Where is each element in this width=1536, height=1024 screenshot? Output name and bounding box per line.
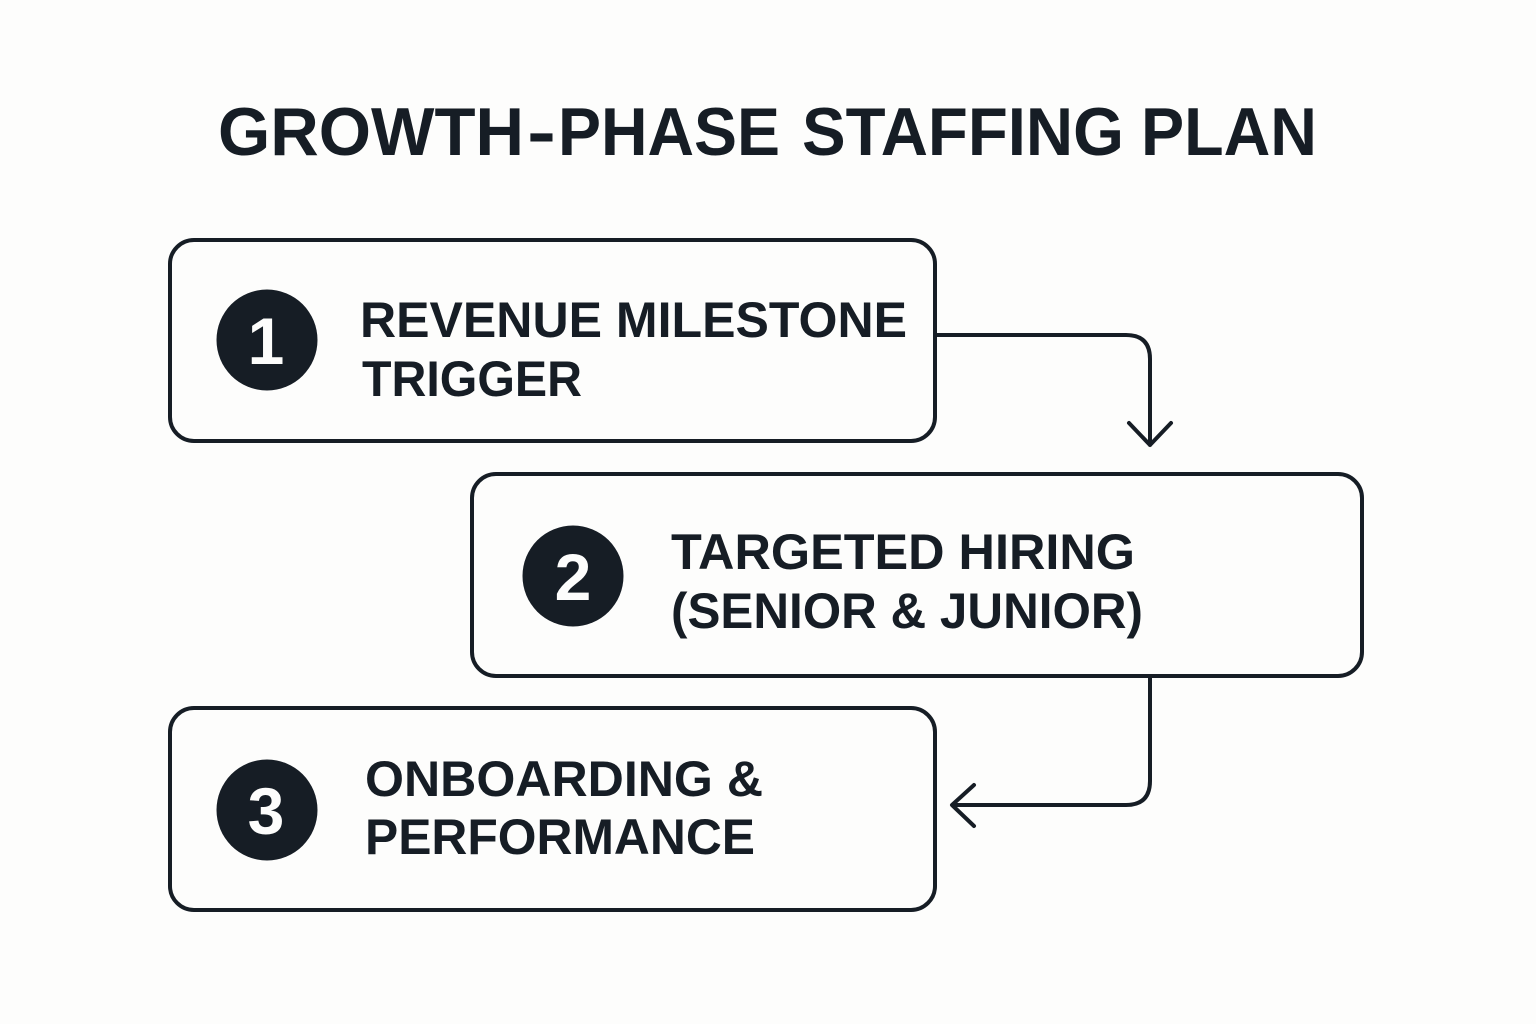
text: step 1 label: REVENUE MILESTONE bbox=[360, 292, 907, 348]
icon: number 3 badge: 3 bbox=[248, 774, 284, 848]
panel: step 1 bbox=[170, 240, 935, 441]
text: step 3 label: PERFORMANCE bbox=[365, 809, 755, 865]
text: step 1 label: TRIGGER bbox=[362, 351, 582, 407]
title: GROWTH bbox=[218, 94, 524, 170]
icon: number 1 badge bbox=[216, 290, 318, 390]
text: step 2 label: (SENIOR & JUNIOR) bbox=[671, 583, 1143, 639]
title: - bbox=[527, 94, 556, 170]
title: PHASE bbox=[558, 94, 780, 170]
panel: step 3 bbox=[170, 708, 935, 910]
icon: number 1 badge: 1 bbox=[248, 304, 284, 378]
title: STAFFING bbox=[802, 94, 1124, 170]
arrow: step 2 to step 3 bbox=[952, 678, 1150, 826]
arrow: step 1 to step 2 bbox=[937, 335, 1171, 445]
text: step 2 label: TARGETED HIRING bbox=[671, 524, 1135, 580]
icon: number 3 badge bbox=[216, 760, 318, 860]
panel: step 2 bbox=[472, 474, 1362, 676]
icon: number 2 badge: 2 bbox=[555, 540, 591, 614]
title: PLAN bbox=[1141, 94, 1317, 170]
text: step 3 label: ONBOARDING & bbox=[365, 751, 763, 807]
icon: number 2 badge bbox=[522, 526, 624, 626]
